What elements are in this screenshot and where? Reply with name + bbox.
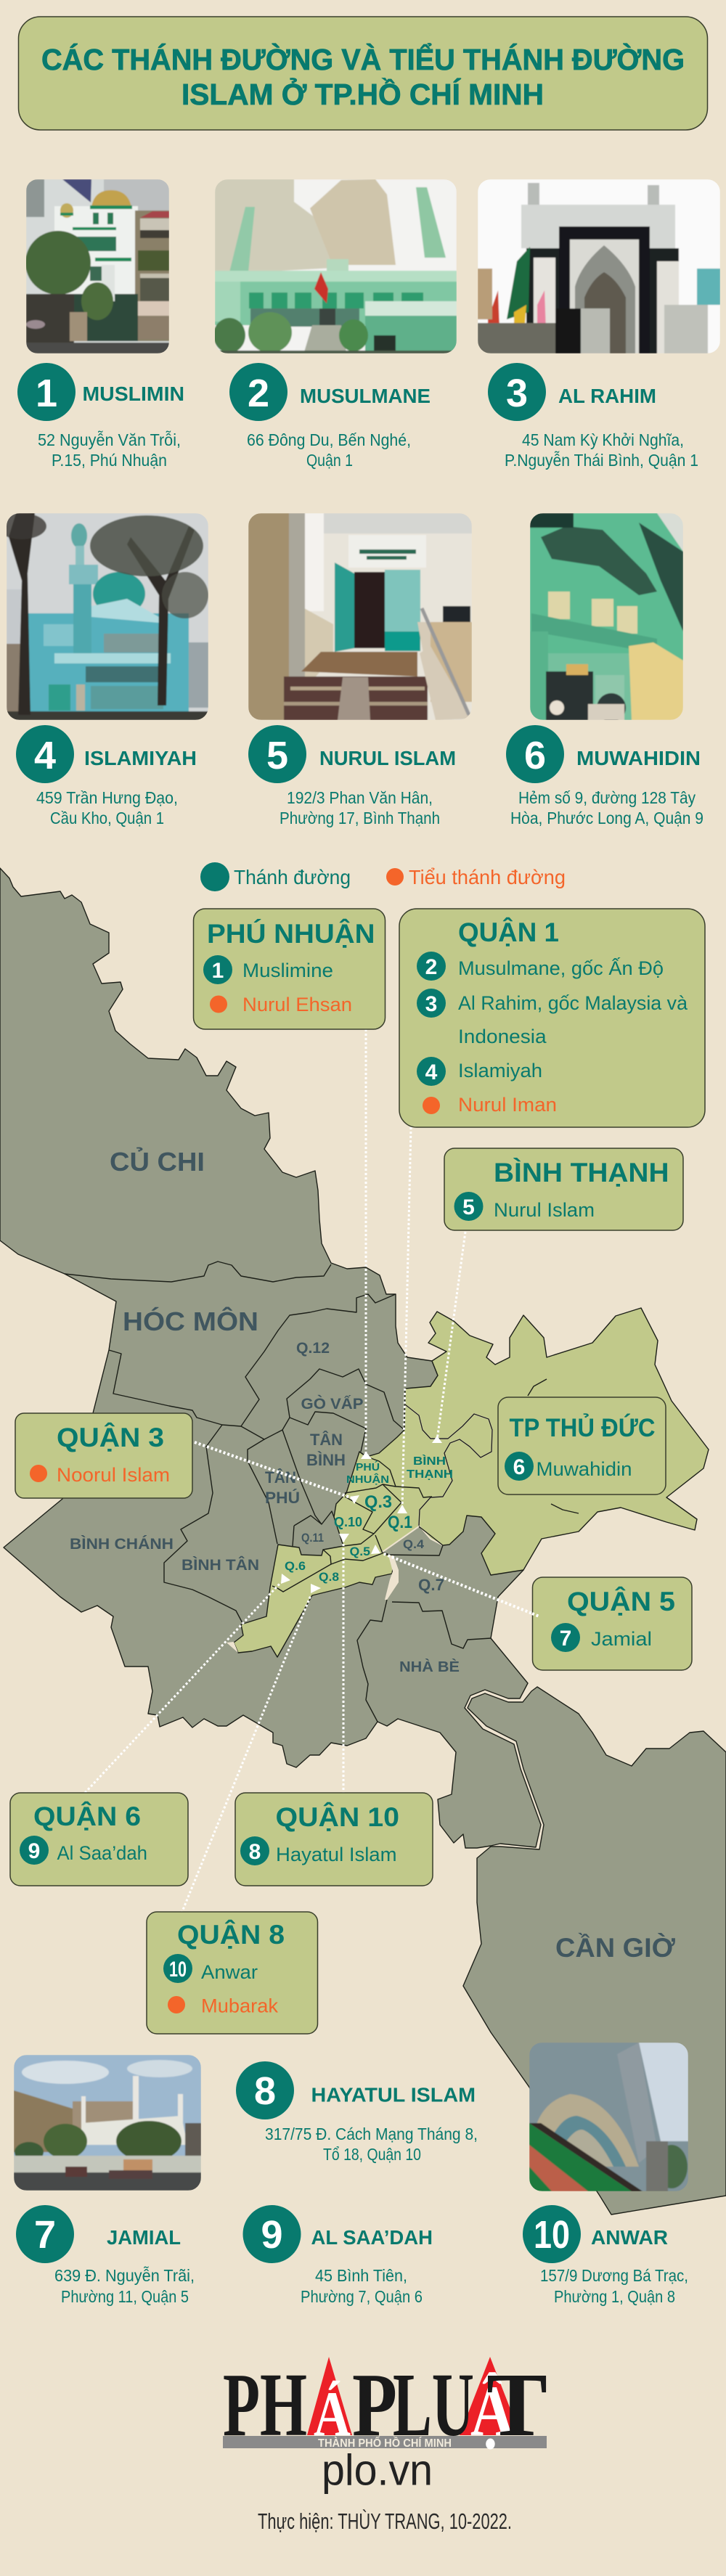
map labels: highlighted districts: PHÚ	[356, 1460, 380, 1473]
logo: Pháp Luật: Ậ	[470, 2371, 514, 2451]
number badge 10: 10	[534, 2213, 570, 2257]
legend	[200, 862, 566, 891]
panel: Quận 10: 8	[249, 1840, 261, 1864]
panel: Bình Thạnh: 5	[462, 1195, 475, 1219]
name JAMIAL: JAMIAL	[107, 2226, 181, 2249]
address 10	[540, 2266, 688, 2306]
legend: Tiểu thánh đường	[409, 866, 566, 888]
panel: Quận 3: Noorul Islam	[57, 1464, 170, 1486]
panel: Quận 10: Hayatul Islam	[276, 1844, 396, 1865]
map labels: gray districts: CỦ CHI	[110, 1146, 205, 1177]
map labels: gray districts: CẦN GIỜ	[555, 1932, 675, 1963]
panel: Phú Nhuận	[193, 909, 385, 1029]
address 3: 45 Nam Kỳ Khởi Nghĩa,	[522, 430, 684, 449]
panel: Quận 1: 4	[425, 1060, 438, 1084]
address 4	[36, 788, 178, 827]
address 5: Phường 17, Bình Thạnh	[280, 809, 440, 827]
number badge 7	[16, 2205, 74, 2263]
photo: Muslimin mosque	[25, 179, 169, 353]
panel: Quận 6: QUẬN 6	[33, 1801, 141, 1831]
photo: Islamiyah mosque	[0, 513, 208, 720]
logo: Pháp Luật: PH	[223, 2355, 307, 2456]
panel: TP Thủ Đức: 6	[513, 1455, 525, 1479]
number badge 8: 8	[254, 2069, 276, 2113]
map labels: gray districts	[70, 1146, 675, 1963]
number badge 9	[242, 2205, 301, 2263]
panel: Phú Nhuận: Nurul Ehsan	[242, 994, 352, 1015]
address 1	[38, 430, 181, 470]
number badge 6	[506, 725, 564, 783]
number badge 5	[248, 725, 306, 783]
address 8	[265, 2125, 478, 2164]
address 10: Phường 1, Quận 8	[554, 2287, 675, 2306]
panel: Quận 1: Islamiyah	[458, 1060, 542, 1081]
address 9: Phường 7, Quận 6	[301, 2287, 423, 2306]
panel: Quận 1: Al Rahim, gốc Malaysia và	[458, 992, 688, 1014]
map labels: gray districts: BÌNH CHÁNH	[70, 1536, 174, 1553]
panel: Quận 10	[235, 1793, 433, 1886]
address 6: Hẻm số 9, đường 128 Tây	[518, 788, 696, 807]
panel: Quận 5: 7	[560, 1627, 571, 1651]
name MUSULMANE: MUSULMANE	[300, 385, 431, 407]
map labels: highlighted districts: Q.8	[319, 1570, 339, 1584]
map labels: highlighted districts: NHUẬN	[346, 1473, 389, 1486]
panel: Quận 5: QUẬN 5	[567, 1586, 675, 1616]
logo: Pháp Luật: LU	[393, 2355, 474, 2456]
address 10: 157/9 Dương Bá Trạc,	[540, 2266, 688, 2285]
number badge 7: 7	[34, 2213, 56, 2257]
map labels: gray districts: BÌNH	[306, 1451, 346, 1469]
name ANWAR: ANWAR	[591, 2226, 668, 2249]
panel: Phú Nhuận: 1	[212, 959, 224, 983]
address 5: 192/3 Phan Văn Hân,	[287, 788, 433, 807]
address 6	[510, 788, 703, 827]
panel: Quận 5	[533, 1577, 692, 1670]
address 7: Phường 11, Quận 5	[61, 2287, 189, 2306]
logo: Pháp Luật: T	[486, 2355, 547, 2456]
panel: Quận 6	[10, 1793, 188, 1886]
address 2: 66 Đông Du, Bến Nghé,	[247, 430, 411, 449]
number badge 10	[523, 2205, 581, 2263]
map: gray northern and central districts	[0, 868, 541, 1848]
title line 2: ISLAM Ở TP.HỒ CHÍ MINH	[182, 78, 544, 111]
address 3	[505, 430, 698, 470]
map labels: highlighted districts: THẠNH	[407, 1468, 453, 1481]
panel: Quận 10: QUẬN 10	[276, 1802, 399, 1832]
panel: Phú Nhuận: PHÚ NHUẬN	[207, 918, 375, 949]
number badge 6: 6	[524, 734, 546, 777]
map labels: gray districts: Q.12	[296, 1340, 330, 1357]
number badge 2	[229, 363, 287, 421]
panel: Quận 1: Indonesia	[458, 1026, 547, 1047]
address 8: Tổ 18, Quận 10	[323, 2145, 421, 2164]
map labels: highlighted districts: Q.3	[364, 1492, 392, 1512]
map labels: gray districts: Q.7	[418, 1576, 444, 1594]
map labels: gray districts: NHÀ BÈ	[399, 1659, 460, 1675]
panel: Bình Thạnh: Nurul Islam	[494, 1199, 595, 1221]
panel: Quận 8: Anwar	[201, 1961, 258, 1983]
panel: Quận 1: 2	[425, 955, 437, 979]
map labels: highlighted districts: Q.1	[388, 1513, 412, 1532]
map labels: highlighted districts: Q.10	[334, 1515, 362, 1529]
panel: Quận 6: 9	[28, 1839, 40, 1863]
panel: Quận 1: Musulmane, gốc Ấn Độ	[458, 957, 664, 979]
panel: Phú Nhuận: Muslimine	[242, 960, 333, 981]
map labels: highlighted districts: Q.5	[350, 1545, 370, 1558]
number badge 3	[488, 363, 546, 421]
address 1: 52 Nguyễn Văn Trỗi,	[38, 430, 181, 449]
photo: Nurul Islam mosque	[248, 513, 472, 720]
panel: Bình Thạnh: BÌNH THẠNH	[494, 1158, 669, 1187]
credit: Thực hiện: THÙY TRANG, 10-2022.	[258, 2508, 512, 2534]
address 9: 45 Bình Tiên,	[315, 2266, 407, 2285]
panel: Quận 1: Nurul Iman	[458, 1094, 557, 1116]
panel: Quận 5: Jamial	[591, 1628, 652, 1650]
name MUWAHIDIN: MUWAHIDIN	[576, 747, 701, 769]
map labels: gray districts: GÒ VẤP	[301, 1395, 363, 1412]
map labels: gray districts: Q.11	[301, 1531, 324, 1545]
map: highlighted green districts	[234, 1308, 709, 1657]
panel: Quận 8: Mubarak	[201, 1995, 279, 2016]
address 6: Hòa, Phước Long A, Quận 9	[510, 809, 703, 827]
panel: Quận 6: Al Saa’dah	[57, 1842, 147, 1864]
panel: TP Thủ Đức	[498, 1397, 666, 1495]
number badge 4: 4	[34, 734, 56, 777]
photo: Jamial mosque	[14, 2055, 201, 2191]
map labels: highlighted districts: BÌNH	[413, 1454, 446, 1468]
title panel	[19, 17, 707, 130]
map labels: gray districts: TÂN	[310, 1431, 343, 1449]
address 5	[280, 788, 440, 827]
address 7: 639 Đ. Nguyễn Trãi,	[54, 2266, 195, 2285]
map: river and district boundaries	[65, 1262, 579, 1722]
number badge 8	[236, 2061, 294, 2119]
photo: Al Rahim mosque	[478, 179, 720, 353]
photo: Musulmane mosque	[213, 179, 457, 353]
name ISLAMIYAH: ISLAMIYAH	[84, 747, 197, 769]
number badge 9: 9	[261, 2213, 283, 2257]
logo: Pháp Luật: P	[352, 2355, 397, 2456]
logo: Pháp Luật	[223, 2355, 547, 2456]
number badge 3: 3	[506, 372, 528, 415]
title line 1: CÁC THÁNH ĐƯỜNG VÀ TIỂU THÁNH ĐƯỜNG	[41, 42, 685, 76]
number badge 1: 1	[36, 372, 57, 415]
panel: Quận 1	[399, 909, 705, 1127]
address 9	[301, 2266, 423, 2306]
map labels: highlighted districts: Q.6	[285, 1559, 306, 1573]
panel: Bình Thạnh	[444, 1148, 683, 1230]
photo: Muwahidin mosque	[530, 513, 683, 722]
map of Ho Chi Minh City	[0, 868, 726, 2215]
legend: Thánh đường	[234, 866, 351, 888]
map: Cần Giờ district	[463, 1687, 726, 2215]
address 8: 317/75 Đ. Cách Mạng Tháng 8,	[265, 2125, 478, 2143]
logo: Pháp Luật: Á	[314, 2379, 351, 2450]
photo: Anwar mosque	[529, 2043, 688, 2191]
address 1: P.15, Phú Nhuận	[52, 451, 167, 470]
name AL RAHIM: AL RAHIM	[558, 385, 656, 407]
address 2: Quận 1	[306, 451, 353, 470]
address 2	[247, 430, 411, 470]
website plo.vn: plo.vn	[322, 2446, 433, 2494]
number badge 1	[17, 363, 76, 421]
name NURUL ISLAM: NURUL ISLAM	[319, 747, 456, 769]
map labels: gray districts: TÂN	[265, 1468, 296, 1487]
number badge 2: 2	[248, 372, 269, 415]
panel: Quận 3: QUẬN 3	[57, 1422, 164, 1452]
name AL SAA'DAH: AL SAA’DAH	[311, 2226, 433, 2249]
logo: Pháp Luật: THÀNH PHỐ HỒ CHÍ MINH	[318, 2435, 452, 2450]
number badge 4	[16, 725, 74, 783]
map labels: gray districts: Q.4	[403, 1537, 425, 1551]
map labels: gray districts: PHÚ	[265, 1489, 300, 1507]
address 7	[54, 2266, 195, 2306]
map labels: gray districts: HÓC MÔN	[123, 1306, 258, 1336]
panel: Quận 3	[15, 1413, 192, 1498]
address 4: Cầu Kho, Quận 1	[50, 809, 164, 827]
name MUSLIMIN: MUSLIMIN	[83, 383, 184, 405]
panel: Quận 1: 3	[425, 992, 437, 1016]
address 3: P.Nguyễn Thái Bình, Quận 1	[505, 451, 698, 470]
name HAYATUL ISLAM: HAYATUL ISLAM	[311, 2083, 476, 2106]
panel: Quận 1: QUẬN 1	[458, 917, 559, 947]
panel: Quận 8: QUẬN 8	[177, 1919, 285, 1950]
number badge 5: 5	[266, 734, 288, 777]
panel: TP Thủ Đức: Muwahidin	[536, 1458, 632, 1480]
panel: Quận 8	[147, 1912, 318, 2034]
connector lines with pointers	[85, 1029, 539, 1913]
panel: Quận 8: 10	[169, 1958, 187, 1982]
map labels: highlighted districts	[285, 1454, 453, 1584]
panel: TP Thủ Đức: TP THỦ ĐỨC	[510, 1413, 655, 1442]
map labels: gray districts: BÌNH TÂN	[182, 1556, 259, 1574]
connector end over Quận 5 panel	[532, 1614, 539, 1616]
address 4: 459 Trần Hưng Đạo,	[36, 788, 178, 807]
